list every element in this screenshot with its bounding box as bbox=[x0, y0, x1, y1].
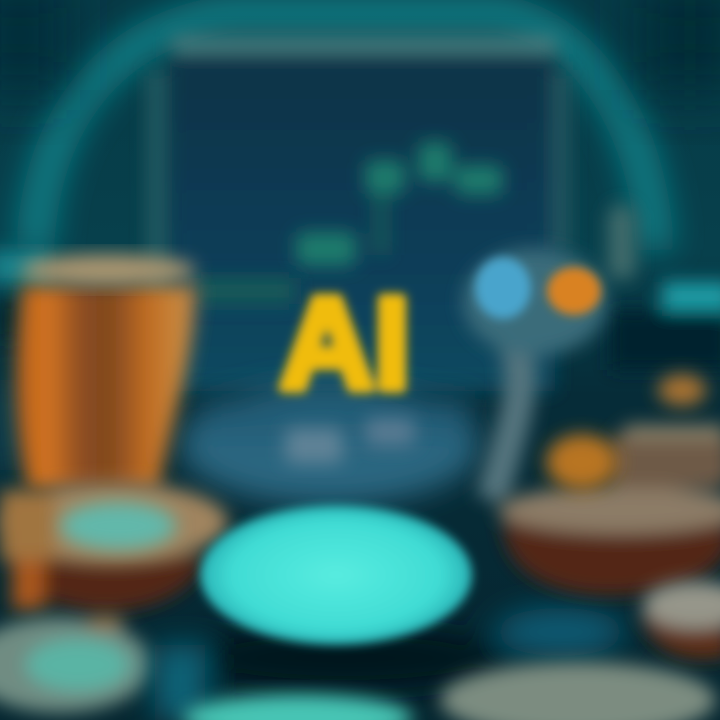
chart: green line marks bbox=[296, 142, 503, 266]
table area: blue-grey surface bbox=[0, 380, 480, 505]
panel: orange cup bbox=[16, 254, 198, 490]
panel: bottom left dish bbox=[0, 615, 152, 713]
panel: glowing turquoise pool bbox=[200, 505, 472, 645]
panel: right bowl bbox=[498, 374, 720, 595]
glow band left bbox=[0, 250, 720, 370]
panel: left bowl bbox=[0, 482, 228, 611]
teal arch bbox=[35, 14, 655, 250]
panel: bottom turquoise dish bbox=[183, 694, 413, 720]
icon: globe on stand bbox=[463, 205, 636, 500]
dark corners bbox=[0, 0, 720, 90]
reflected text smudge bbox=[285, 418, 415, 464]
panel: dark screen bbox=[148, 36, 570, 391]
dark base under glowing pool bbox=[155, 608, 625, 720]
title: AI letters: AI bbox=[280, 270, 410, 416]
panel: far right dish bbox=[640, 581, 720, 659]
panel: bottom right dish bbox=[440, 662, 716, 720]
